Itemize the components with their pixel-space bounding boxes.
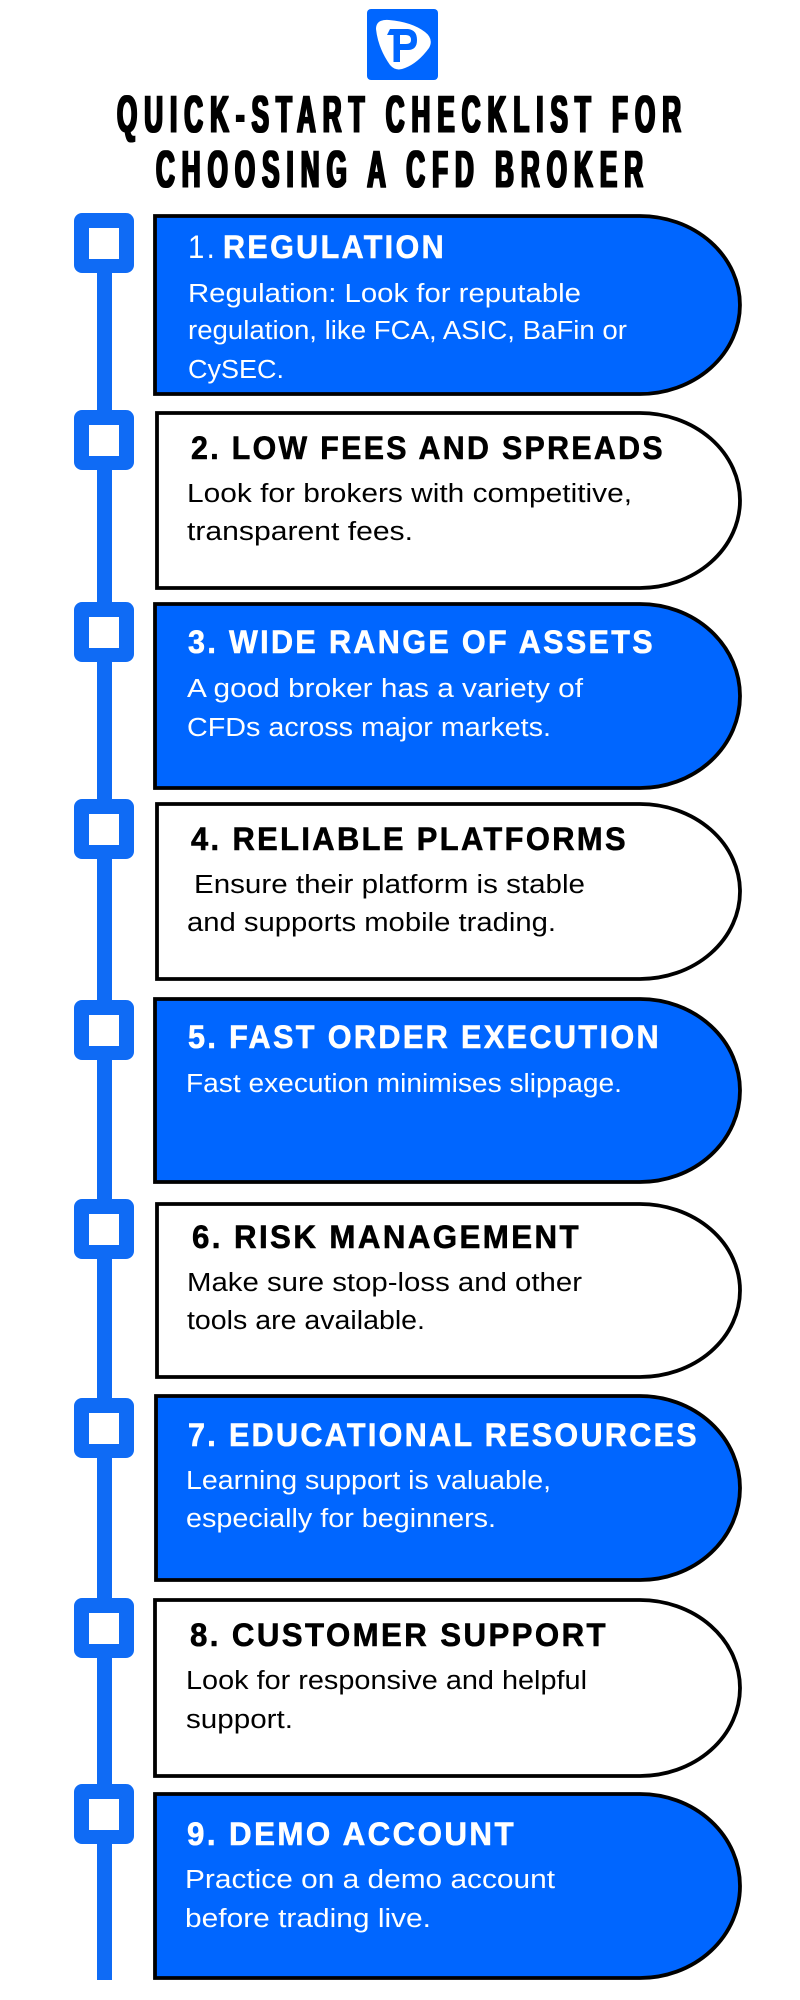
body 8: Look for responsive and helpful <box>186 1667 587 1695</box>
heading 8: 8. CUSTOMER SUPPORT <box>190 1617 608 1653</box>
heading 7: 7. EDUCATIONAL RESOURCES <box>188 1417 699 1453</box>
marker 2 <box>74 410 134 470</box>
heading 4: 4. RELIABLE PLATFORMS <box>191 821 628 857</box>
marker 9 <box>74 1784 134 1844</box>
panel: 7 educational resources <box>156 1396 740 1580</box>
body 4: and supports mobile trading. <box>187 909 556 937</box>
marker 7 <box>74 1398 134 1458</box>
panel: 1 regulation <box>155 216 740 394</box>
body 4: Ensure their platform is stable <box>194 871 585 899</box>
body 8 <box>186 1667 587 1734</box>
body 8: support. <box>186 1706 293 1734</box>
body 3: A good broker has a variety of <box>187 675 584 703</box>
body 4 <box>187 871 585 937</box>
body 2: Look for brokers with competitive, <box>187 480 632 508</box>
body 6: tools are available. <box>187 1307 425 1335</box>
timeline <box>74 213 134 1980</box>
heading 3: 3. WIDE RANGE OF ASSETS <box>188 624 655 660</box>
body 6 <box>187 1269 583 1335</box>
body 1 <box>188 280 628 384</box>
heading 5: 5. FAST ORDER EXECUTION <box>188 1019 661 1055</box>
body 1: CySEC. <box>188 356 284 384</box>
heading 1: REGULATION <box>223 229 446 265</box>
marker 5 <box>74 1000 134 1060</box>
logo icon <box>367 9 438 80</box>
panel: 4 reliable platforms <box>157 804 740 979</box>
body 1: regulation, like FCA, ASIC, BaFin or <box>188 317 628 345</box>
body 7: Learning support is valuable, <box>186 1467 551 1495</box>
panel: 8 customer support <box>155 1600 740 1776</box>
body 3: CFDs across major markets. <box>187 714 551 742</box>
marker 6 <box>74 1199 134 1259</box>
title <box>117 85 681 198</box>
heading 2: 2. LOW FEES AND SPREADS <box>191 430 665 466</box>
body 5: Fast execution minimises slippage. <box>186 1070 622 1098</box>
panel: 6 risk management <box>157 1204 740 1377</box>
body 7 <box>186 1467 551 1533</box>
body 9 <box>185 1866 555 1933</box>
body 1: Regulation: Look for reputable <box>188 280 581 308</box>
body 3 <box>187 675 584 742</box>
body 2: transparent fees. <box>187 518 413 546</box>
body 2 <box>187 480 632 546</box>
marker 8 <box>74 1598 134 1658</box>
panel: 5 fast order execution <box>155 999 740 1182</box>
title: QUICK-START CHECKLIST FOR <box>117 85 681 143</box>
heading 6: 6. RISK MANAGEMENT <box>192 1219 581 1255</box>
body 7: especially for beginners. <box>186 1505 496 1533</box>
panel: 2 low fees and spreads <box>157 413 740 588</box>
title: CHOOSING A CFD BROKER <box>156 140 643 198</box>
panel: 3 wide range of assets <box>155 604 740 788</box>
marker 4 <box>74 799 134 859</box>
heading 1: 1. <box>188 229 217 265</box>
panel: 9 demo account <box>155 1794 740 1978</box>
body 6: Make sure stop-loss and other <box>187 1269 583 1297</box>
body 9: before trading live. <box>185 1905 431 1933</box>
marker 1 <box>74 213 134 273</box>
body 9: Practice on a demo account <box>185 1866 555 1894</box>
heading 9: 9. DEMO ACCOUNT <box>187 1816 516 1852</box>
marker 3 <box>74 602 134 662</box>
